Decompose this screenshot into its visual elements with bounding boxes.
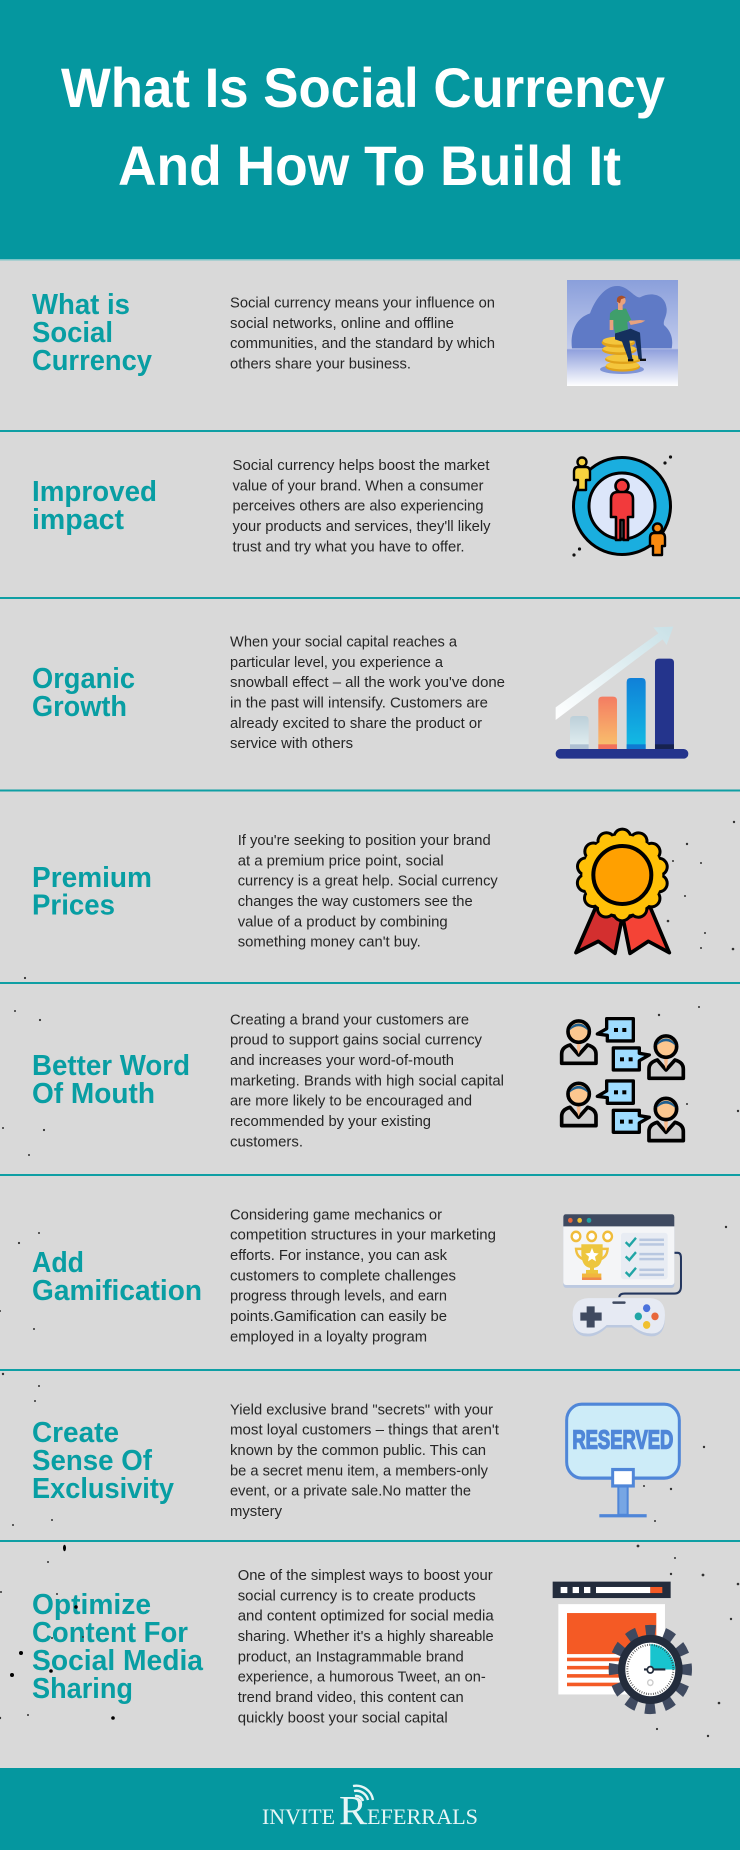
text: add gamification: employed in a loyalty program <box>230 1328 427 1345</box>
logo: invite referrals <box>262 1786 478 1833</box>
text: what is social currency: social networks, online and offline <box>230 315 454 332</box>
text: create sense of exclusivity: most loyal customers – things that aren't <box>230 1422 500 1439</box>
text: create sense of exclusivity <box>230 1401 500 1520</box>
text: add gamification: customers to complete challenges <box>230 1267 456 1284</box>
heading: better word of mouth: Of Mouth <box>32 1078 155 1110</box>
text: organic growth: When your social capital reaches a <box>230 634 458 650</box>
text: improved impact: trust and try what you have to offer. <box>232 538 464 555</box>
text: add gamification <box>230 1206 496 1345</box>
heading: create sense of exclusivity <box>32 1417 174 1505</box>
panel: optimize content <box>0 1542 740 1768</box>
text: better word of mouth: customers. <box>230 1133 303 1150</box>
text: add gamification: efforts. For instance, you can ask <box>230 1247 447 1264</box>
heading: create sense of exclusivity: Sense Of <box>32 1445 152 1477</box>
heading: optimize content: Sharing <box>32 1673 133 1705</box>
text: better word of mouth: proud to support gains social currency <box>230 1032 482 1049</box>
text: optimize content: social currency is to create products <box>238 1587 476 1604</box>
text: premium prices: If you're seeking to position your brand <box>238 832 491 849</box>
heading: better word of mouth <box>32 1050 190 1110</box>
text: better word of mouth <box>230 1011 504 1150</box>
text: optimize content: sharing. Whether it's a highly shareable <box>238 1628 494 1645</box>
text: premium prices: something money can't buy. <box>238 934 421 951</box>
text: premium prices: value of a product by combining <box>238 913 448 930</box>
text: optimize content: experience, a humorous Tweet, an on- <box>238 1669 486 1686</box>
text: improved impact: Social currency helps boost the market <box>232 457 490 474</box>
heading: what is social currency: What is <box>32 289 130 321</box>
icon: people talking <box>562 1019 683 1141</box>
text: organic growth: in the past will intensify. Customers are <box>230 694 488 712</box>
heading: premium prices: Premium <box>32 862 152 894</box>
title: What Is Social Currency <box>61 56 665 119</box>
text: premium prices <box>238 832 498 951</box>
heading: improved impact: Improved <box>32 476 157 508</box>
text: create sense of exclusivity: known by the common public. This can <box>230 1442 486 1459</box>
text: add gamification: progress through levels, and earn <box>230 1288 447 1305</box>
icon: award ribbon <box>576 835 669 953</box>
text: premium prices: at a premium price point, social <box>238 852 444 869</box>
text: improved impact: your products and services, they'll likely <box>232 518 491 535</box>
text: premium prices: currency is a great help. Social currency <box>238 873 498 890</box>
text: add gamification: competition structures in your marketing <box>230 1227 496 1244</box>
text: optimize content <box>238 1567 494 1726</box>
text: optimize content: quickly boost your social capital <box>238 1709 448 1726</box>
text: premium prices: changes the way customers see the <box>238 893 473 910</box>
text: optimize content: trend brand video, this content can <box>238 1689 464 1706</box>
heading: better word of mouth: Better Word <box>32 1050 190 1082</box>
text: create sense of exclusivity: mystery <box>230 1503 282 1520</box>
section dividers <box>0 430 740 1542</box>
icon: reserved sign: RESERVED <box>572 1426 673 1455</box>
heading: optimize content: Social Media <box>32 1645 204 1677</box>
text: optimize content: product, an Instagrammable brand <box>238 1648 464 1665</box>
heading: create sense of exclusivity: Create <box>32 1417 119 1449</box>
panel: premium prices <box>0 791 740 983</box>
heading: premium prices: Prices <box>32 890 115 922</box>
text: better word of mouth: recommended by your existing <box>230 1113 431 1130</box>
icon: reserved sign <box>567 1404 679 1517</box>
title <box>61 56 665 197</box>
logo: invite referrals: INVITE <box>262 1804 335 1829</box>
icon: man sitting on coins <box>567 280 678 386</box>
heading: organic growth <box>32 663 135 723</box>
text: create sense of exclusivity: event, or a private sale.No matter the <box>230 1483 471 1500</box>
icon: game controller and trophy window <box>563 1214 681 1336</box>
text: create sense of exclusivity: Yield exclusive brand "secrets" with your <box>230 1401 493 1418</box>
title: And How To Build It <box>118 134 621 197</box>
text: better word of mouth: are more likely to be encouraged and <box>230 1093 472 1110</box>
text: what is social currency: others share your business. <box>230 356 411 372</box>
text: what is social currency <box>230 294 495 372</box>
heading: premium prices <box>32 862 152 922</box>
text: improved impact: value of your brand. When a consumer <box>232 477 484 494</box>
text: improved impact: perceives others are also experiencing <box>232 498 484 515</box>
logo: invite referrals: R <box>339 1787 368 1833</box>
heading: what is social currency: Social <box>32 317 113 349</box>
logo: invite referrals: EFERRALS <box>367 1804 478 1829</box>
panel: what is social currency <box>0 261 740 431</box>
text: organic growth: service with others <box>230 735 353 752</box>
text: what is social currency: Social currency means your influence on <box>230 294 495 312</box>
heading: create sense of exclusivity: Exclusivity <box>32 1473 174 1505</box>
text: better word of mouth: Creating a brand your customers are <box>230 1011 469 1028</box>
header banner <box>0 0 740 260</box>
text: improved impact <box>232 457 491 555</box>
text: organic growth <box>230 634 505 752</box>
heading: improved impact: impact <box>32 504 124 536</box>
heading: what is social currency: Currency <box>32 345 152 377</box>
icon: person in target ring <box>572 455 672 557</box>
heading: organic growth: Growth <box>32 691 127 723</box>
heading: add gamification: Add <box>32 1247 84 1279</box>
text: what is social currency: communities, and the standard by which <box>230 335 495 352</box>
icon: rising bar chart <box>556 627 688 759</box>
heading: optimize content <box>32 1589 204 1705</box>
text: organic growth: particular level, you experience a <box>230 654 444 671</box>
heading: optimize content: Optimize <box>32 1589 151 1621</box>
text: create sense of exclusivity: be a secret menu item, a members-only <box>230 1462 488 1479</box>
panel: better word of mouth <box>0 984 740 1174</box>
panel: improved impact <box>0 432 740 598</box>
panel: add gamification <box>0 1175 740 1370</box>
heading: optimize content: Content For <box>32 1617 188 1649</box>
heading: add gamification: Gamification <box>32 1275 202 1307</box>
text: add gamification: points.Gamification can easily be <box>230 1308 447 1325</box>
heading: organic growth: Organic <box>32 663 135 695</box>
text: better word of mouth: and increases your word-of-mouth <box>230 1052 454 1069</box>
footer banner <box>0 1768 740 1850</box>
panel: organic growth <box>0 599 740 790</box>
text: better word of mouth: marketing. Brands with high social capital <box>230 1072 504 1089</box>
panel: create sense of exclusivity <box>0 1371 740 1541</box>
text: optimize content: One of the simplest ways to boost your <box>238 1567 493 1584</box>
text: organic growth: snowball effect – all the work you've done <box>230 674 505 691</box>
text: add gamification: Considering game mechanics or <box>230 1206 442 1223</box>
heading: improved impact <box>32 476 157 536</box>
heading: add gamification <box>32 1247 202 1307</box>
text: optimize content: and content optimized for social media <box>238 1608 494 1625</box>
heading: what is social currency <box>32 289 152 377</box>
icon: web page with speed gear <box>553 1582 686 1708</box>
text: organic growth: already excited to share the product or <box>230 715 482 732</box>
